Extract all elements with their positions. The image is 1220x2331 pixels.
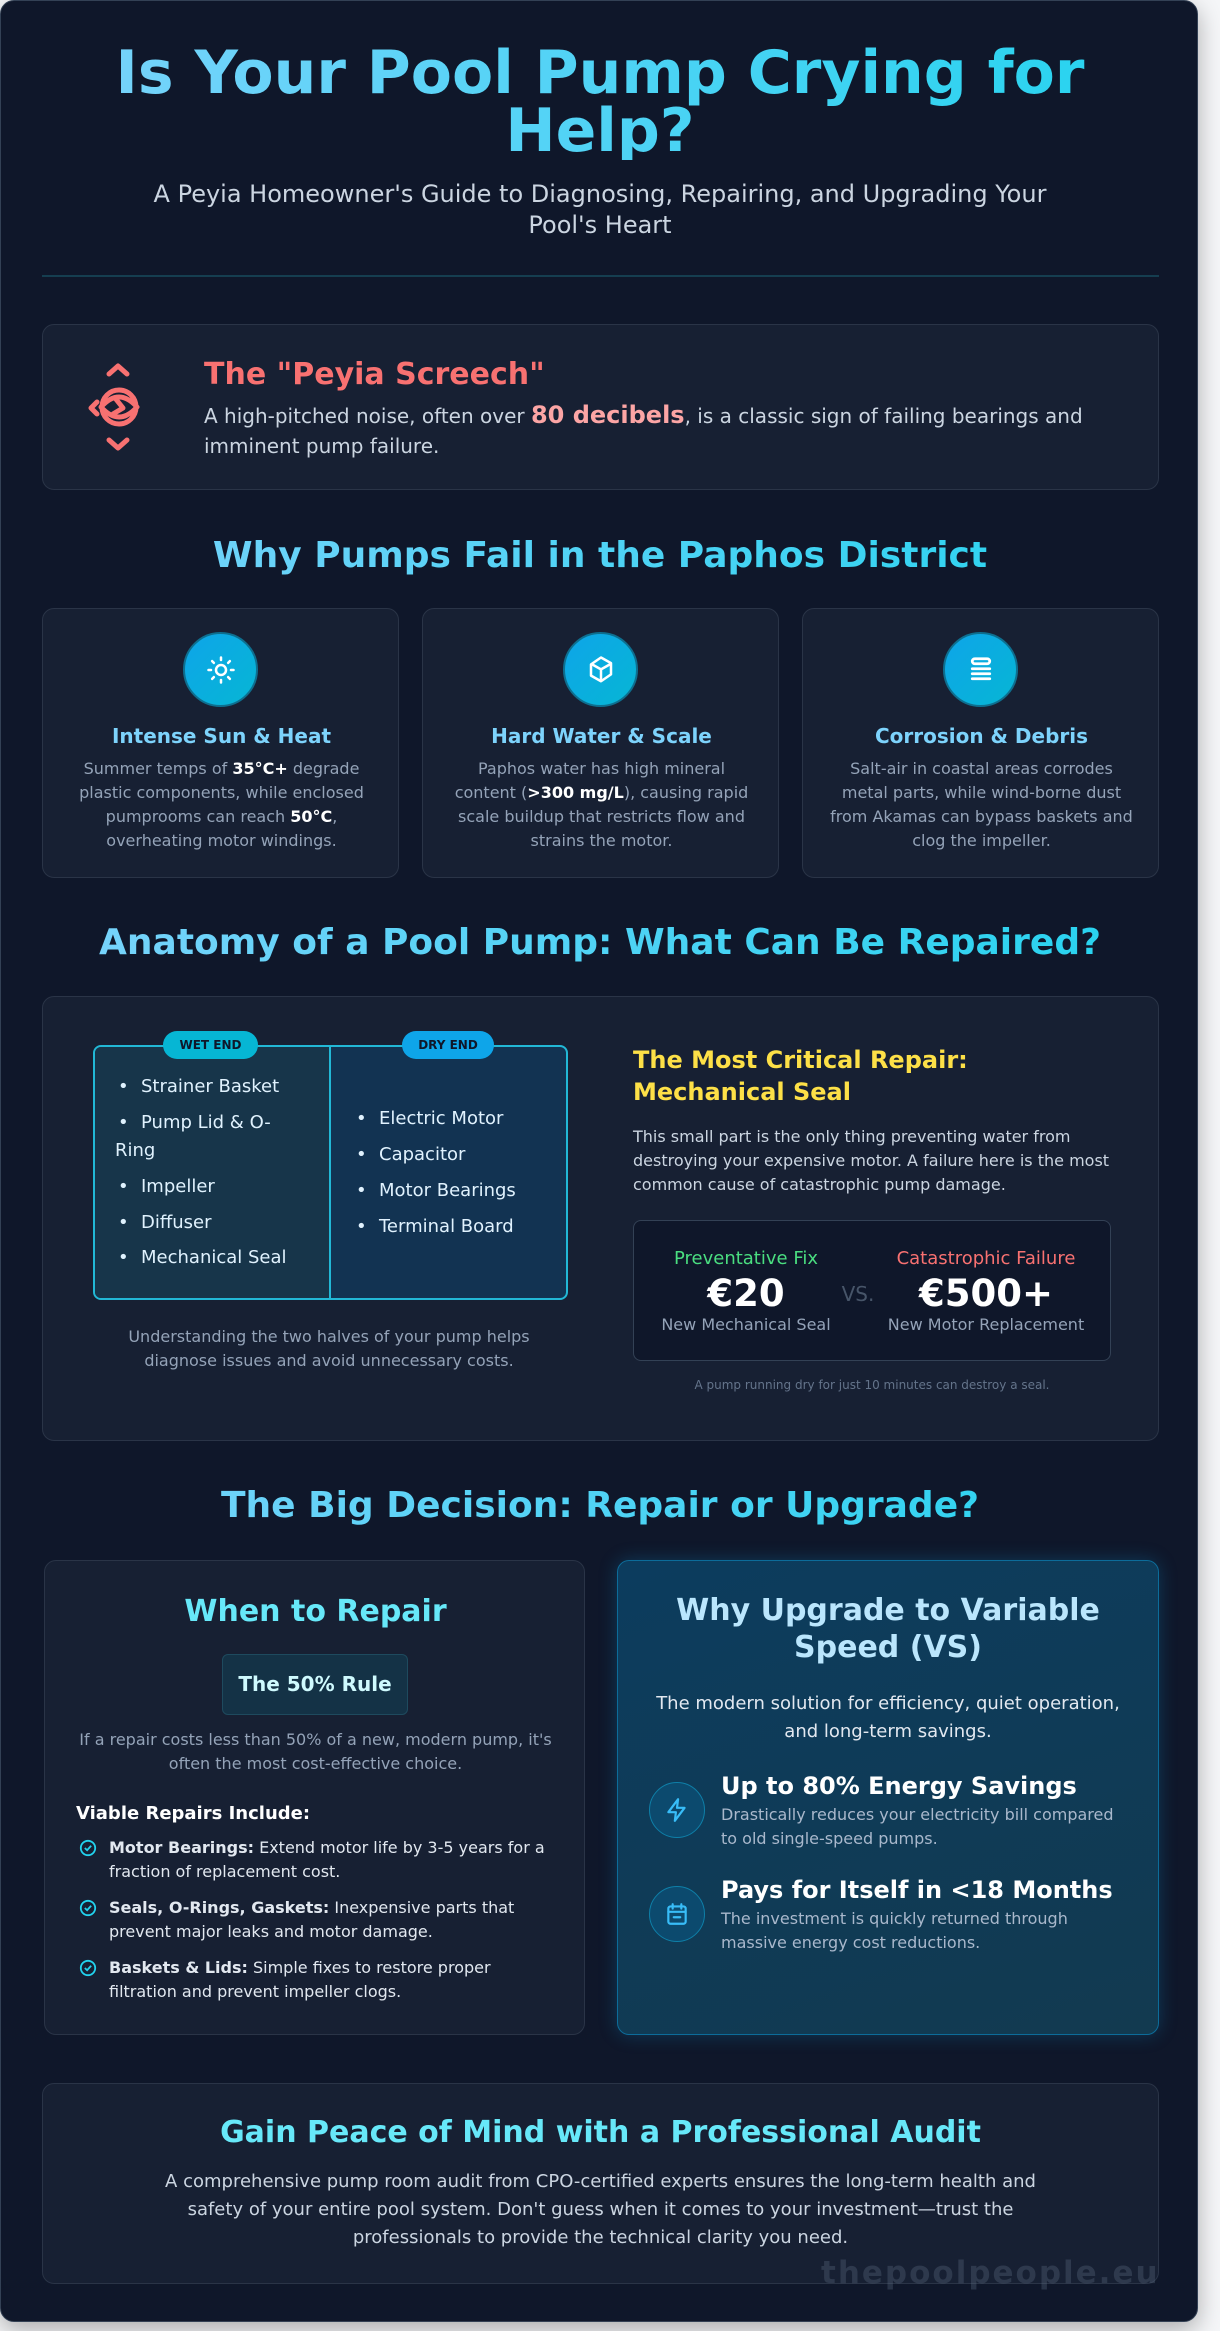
upgrade text <box>656 1693 1120 1742</box>
card text: overheating motor windings. <box>106 831 337 850</box>
icon: layers <box>943 632 1018 707</box>
pill: dry end <box>402 1031 494 1059</box>
repair list: prevent major leaks and motor damage. <box>109 1922 433 1940</box>
panel: when to repair <box>44 1560 585 2035</box>
cost comparison: New Motor Replacement <box>888 1315 1084 1334</box>
card title: Intense Sun & Heat <box>112 724 331 748</box>
heading: why pumps fail: Why Pumps Fail in the Paphos District <box>213 535 987 576</box>
panel: peyia screech <box>42 324 1159 490</box>
cost comparison: €20 <box>707 1272 785 1315</box>
audit title: Gain Peace of Mind with a Professional Audit <box>220 2115 981 2150</box>
cost comparison: Catastrophic Failure <box>897 1248 1075 1269</box>
list: dry end: • <box>356 1144 367 1165</box>
icon: calendar <box>649 1886 705 1942</box>
heading: big decision <box>1 1484 1199 1528</box>
pill: wet end: WET END <box>180 1038 242 1052</box>
list: dry end: • <box>356 1108 367 1129</box>
cost comparison: VS. <box>842 1282 874 1306</box>
list: wet end: Impeller <box>141 1176 215 1197</box>
feature: payback: massive energy cost reductions. <box>721 1933 980 1952</box>
50% rule badge: The 50% Rule <box>238 1672 392 1696</box>
card text: strains the motor. <box>530 831 672 850</box>
list: dry end: Motor Bearings <box>379 1180 516 1201</box>
feature: payback <box>720 1876 1113 1952</box>
critical repair title: Mechanical Seal <box>633 1078 851 1106</box>
heading: big decision: The Big Decision: Repair or Upgrade? <box>221 1485 979 1526</box>
heading: why pumps fail <box>1 534 1199 578</box>
card title: Corrosion & Debris <box>875 724 1088 748</box>
card text: clog the impeller. <box>912 831 1051 850</box>
pill: wet end <box>163 1031 258 1059</box>
cost comparison: Preventative Fix <box>674 1248 818 1269</box>
panel: professional audit <box>42 2083 1159 2284</box>
card text: Summer temps of 35°C+ degrade <box>84 759 359 778</box>
critical repair text: destroying your expensive motor. A failure here is the most <box>633 1151 1109 1170</box>
feature: energy savings: Drastically reduces your electricity bill compared <box>721 1805 1114 1824</box>
list: wet end: Diffuser <box>141 1212 212 1233</box>
cost comparison <box>633 1220 1111 1361</box>
card text: content (>300 mg/L), causing rapid <box>455 783 748 802</box>
title: Help? <box>505 96 695 166</box>
feature: payback: The investment is quickly returned through <box>721 1909 1068 1928</box>
pill: dry end: DRY END <box>418 1038 478 1052</box>
card text: plastic components, while enclosed <box>79 783 364 802</box>
upgrade title <box>676 1593 1100 1665</box>
repair title: When to Repair <box>184 1594 447 1629</box>
list: wet end: • <box>118 1176 129 1197</box>
critical repair title: The Most Critical Repair: <box>633 1046 968 1074</box>
panel: upgrade to VS <box>617 1560 1159 2035</box>
panel: hard water <box>422 608 779 878</box>
heading: anatomy: Anatomy of a Pool Pump: What Can Be Repaired? <box>99 922 1101 963</box>
cost comparison: New Mechanical Seal <box>661 1315 831 1334</box>
list: dry end: Terminal Board <box>379 1216 514 1237</box>
caption <box>128 1327 530 1370</box>
list: dry end <box>356 1108 516 1237</box>
list: wet end: • <box>118 1212 129 1233</box>
repair list: filtration and prevent impeller clogs. <box>109 1982 401 2000</box>
audit text: professionals to provide the technical clarity you need. <box>353 2227 848 2248</box>
caption: Understanding the two halves of your pump helps <box>128 1327 530 1346</box>
icon: bolt <box>649 1782 705 1838</box>
title: Is Your Pool Pump Crying for <box>116 38 1084 108</box>
repair list: Motor Bearings: Extend motor life by 3-5 years for a <box>109 1838 545 1857</box>
upgrade text: and long-term savings. <box>784 1721 992 1742</box>
icon: screech <box>88 363 140 451</box>
cost comparison: €500+ <box>919 1272 1053 1315</box>
card text: Paphos water has high mineral <box>478 759 725 778</box>
list: wet end: Strainer Basket <box>141 1076 279 1097</box>
rule text: often the most cost-effective choice. <box>169 1754 462 1773</box>
critical repair text: This small part is the only thing preventing water from <box>633 1127 1070 1146</box>
list: wet end: • <box>118 1112 129 1133</box>
panel: anatomy <box>42 996 1159 1441</box>
critical repair text <box>632 1127 1109 1194</box>
repair list: fraction of replacement cost. <box>109 1862 340 1880</box>
subtitle <box>154 180 1046 239</box>
card text <box>455 759 748 850</box>
list: dry end: • <box>356 1216 367 1237</box>
repair list: Seals, O-Rings, Gaskets: Inexpensive parts that <box>109 1898 514 1917</box>
screech title: The "Peyia Screech" <box>204 357 545 392</box>
icon: sun <box>183 632 258 707</box>
list: wet end: Pump Lid & O- <box>141 1112 271 1133</box>
feature: payback: Pays for Itself in <18 Months <box>721 1876 1113 1904</box>
list: dry end: Electric Motor <box>379 1108 503 1129</box>
card title: Hard Water & Scale <box>491 724 712 748</box>
card text: pumprooms can reach 50°C, <box>106 807 337 826</box>
diagram: wet/dry ends <box>93 1045 568 1300</box>
list: wet end: • <box>118 1247 129 1268</box>
watermark: thepoolpeople.eu <box>821 2255 1160 2291</box>
feature: energy savings: Up to 80% Energy Savings <box>721 1772 1077 1800</box>
subtitle: Pool's Heart <box>528 211 672 239</box>
footnote: A pump running dry for just 10 minutes can destroy a seal. <box>694 1378 1050 1392</box>
audit text: A comprehensive pump room audit from CPO-certified experts ensures the long-term health and <box>165 2171 1036 2192</box>
list: dry end: • <box>356 1180 367 1201</box>
upgrade title: Why Upgrade to Variable <box>676 1593 1100 1628</box>
panel: sun <box>42 608 399 878</box>
audit text <box>165 2171 1036 2248</box>
screech text: imminent pump failure. <box>204 434 439 458</box>
critical repair title <box>633 1046 968 1106</box>
upgrade text: The modern solution for efficiency, quiet operation, <box>656 1693 1120 1714</box>
panel: corrosion <box>802 608 1159 878</box>
repair list: Baskets & Lids: Simple fixes to restore proper <box>109 1958 491 1977</box>
list: dry end: Capacitor <box>379 1144 465 1165</box>
caption: diagnose issues and avoid unnecessary costs. <box>144 1351 514 1370</box>
list: wet end: Ring <box>115 1140 155 1161</box>
upgrade title: Speed (VS) <box>794 1630 982 1665</box>
repair list <box>80 1838 545 2000</box>
card text: metal parts, while wind-borne dust <box>842 783 1121 802</box>
title <box>1 44 1199 160</box>
icon: cube <box>563 632 638 707</box>
card text: from Akamas can bypass baskets and <box>830 807 1133 826</box>
feature: energy savings <box>721 1772 1114 1848</box>
50% rule badge <box>222 1654 408 1715</box>
card text <box>79 759 364 850</box>
rule text: If a repair costs less than 50% of a new, modern pump, it's <box>79 1730 552 1749</box>
critical repair text: common cause of catastrophic pump damage. <box>633 1175 1006 1194</box>
screech text <box>204 401 1083 458</box>
viable repairs heading: Viable Repairs Include: <box>76 1803 310 1824</box>
rule text <box>79 1730 552 1773</box>
screech text: A high-pitched noise, often over 80 decibels, is a classic sign of failing bearings and <box>204 401 1083 429</box>
list: wet end <box>115 1076 287 1268</box>
list: wet end: Mechanical Seal <box>141 1247 287 1268</box>
audit text: safety of your entire pool system. Don't guess when it comes to your investment—trust the <box>188 2199 1013 2220</box>
card text: scale buildup that restricts flow and <box>458 807 745 826</box>
card text <box>830 759 1133 850</box>
feature: energy savings: to old single-speed pumps. <box>721 1829 938 1848</box>
card text: Salt-air in coastal areas corrodes <box>850 759 1113 778</box>
subtitle: A Peyia Homeowner's Guide to Diagnosing, Repairing, and Upgrading Your <box>154 180 1046 208</box>
list: wet end: • <box>118 1076 129 1097</box>
